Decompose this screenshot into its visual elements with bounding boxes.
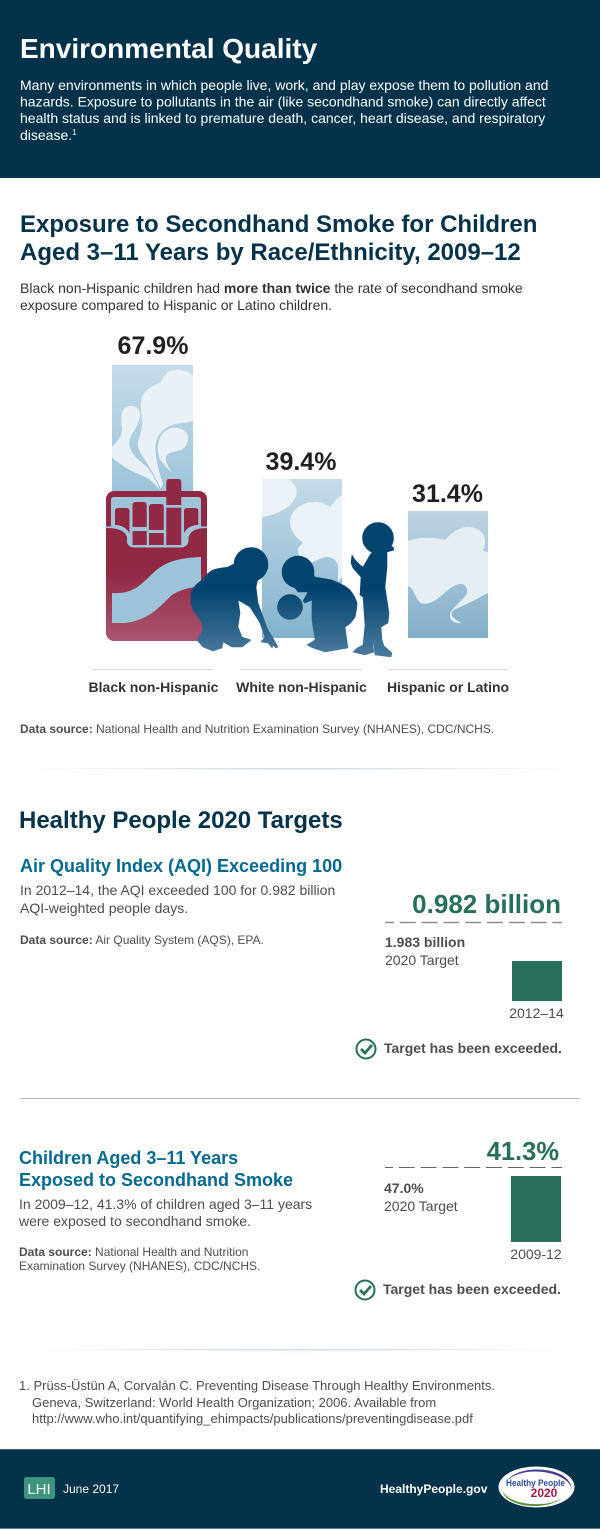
icon: standing child <box>351 522 394 657</box>
target label: 47.0% <box>384 1180 424 1196</box>
icon: check <box>356 1040 376 1058</box>
intro text: Many environments in which people live, work, and play expose them to pollution and <box>20 77 548 93</box>
bar: White non-Hispanic <box>262 479 342 638</box>
heading: secondhand smoke: Exposure to Secondhand Smoke for Children <box>20 211 537 238</box>
panel text: In 2012–14, the AQI exceeded 100 for 0.982 billion <box>20 882 335 898</box>
logo: Healthy People 2020: 2020 <box>531 1486 558 1500</box>
value labels: 67.9% <box>118 332 188 360</box>
status: Target has been exceeded. <box>384 1040 562 1056</box>
value: 0.982 billion <box>412 889 561 919</box>
panel heading: Children Aged 3–11 Years <box>19 1148 238 1168</box>
panel: Children exposed <box>18 1138 562 1300</box>
LHI badge <box>24 1477 55 1499</box>
value labels: 31.4% <box>412 480 483 508</box>
panel: Air Quality Index <box>20 856 564 1058</box>
reference note: Geneva, Switzerland: World Health Organization; 2006. Available from <box>32 1395 436 1410</box>
intro text: disease. <box>20 127 72 143</box>
reference note: http://www.who.int/quantifying_ehimpacts/publications/preventingdisease.pdf <box>32 1411 473 1426</box>
panel heading: Exposed to Secondhand Smoke <box>19 1170 293 1190</box>
data source: Examination Survey (NHANES), CDC/NCHS. <box>19 1259 260 1273</box>
bar: Hispanic or Latino <box>408 511 488 638</box>
target label: 2020 Target <box>384 1198 458 1214</box>
title: Environmental Quality <box>20 33 318 64</box>
heading: secondhand smoke: Aged 3–11 Years by Race/Ethnicity, 2009–12 <box>20 239 521 266</box>
bar <box>511 1176 561 1242</box>
intro text: health status and is linked to premature death, cancer, heart disease, and respiratory <box>20 110 545 126</box>
panel text: were exposed to secondhand smoke. <box>18 1213 251 1229</box>
chart: secondhand smoke exposure <box>89 332 509 695</box>
panel text: In 2009–12, 41.3% of children aged 3–11 years <box>19 1196 312 1212</box>
intro text: 1 <box>72 128 77 137</box>
icon: cigarette pack <box>106 479 207 641</box>
icon: check <box>356 1280 374 1300</box>
category labels <box>89 679 509 695</box>
footer band <box>0 1449 600 1529</box>
value: 41.3% <box>487 1138 559 1166</box>
category labels: Black non-Hispanic <box>89 679 219 695</box>
header band <box>0 0 600 178</box>
target label: 2020 Target <box>385 952 459 968</box>
year label: 2012–14 <box>509 1005 564 1021</box>
target line <box>385 922 562 924</box>
reference note: 1. Prüss-Üstün A, Corvalán C. Preventing Disease Through Healthy Environments. <box>19 1378 495 1393</box>
category labels: Hispanic or Latino <box>387 679 509 695</box>
data source: Data source: Air Quality System (AQS), EPA. <box>20 933 264 947</box>
intro text: hazards. Exposure to pollutants in the air (like secondhand smoke) can directly affect <box>20 94 546 110</box>
panel heading: Air Quality Index (AQI) Exceeding 100 <box>20 856 342 876</box>
value labels: 39.4% <box>266 448 336 476</box>
bar: Black non-Hispanic <box>112 365 193 495</box>
logo: Healthy People 2020 <box>498 1466 574 1508</box>
target label: 1.983 billion <box>385 934 465 950</box>
data source: NHANES: Data source: National Health and Nutrition Examination Survey (NHANES), CDC/NCHS. <box>20 722 494 736</box>
axis rules <box>92 669 508 670</box>
date: June 2017 <box>63 1482 119 1496</box>
LHI badge: LHI <box>27 1481 51 1498</box>
value labels <box>118 332 483 508</box>
category labels: White non-Hispanic <box>236 679 367 695</box>
logo: Healthy People 2020: Healthy People <box>506 1478 565 1489</box>
target line <box>385 1166 562 1168</box>
chart description: Black non-Hispanic children had <box>20 280 224 296</box>
panel text: AQI-weighted people days. <box>20 900 188 916</box>
chart description: exposure compared to Hispanic or Latino children. <box>20 297 332 313</box>
icon: crouching child <box>191 548 278 651</box>
icon: child with ball <box>278 556 357 652</box>
data source: Data source: <box>19 1245 92 1259</box>
heading: targets: Healthy People 2020 Targets <box>19 807 343 834</box>
data source: National Health and Nutrition <box>92 1245 248 1259</box>
bar <box>512 961 562 1001</box>
year label: 2009-12 <box>510 1246 562 1262</box>
chart description: more than twice the rate of secondhand smoke <box>224 280 523 296</box>
status: Target has been exceeded. <box>383 1281 561 1297</box>
site link: HealthyPeople.gov <box>380 1482 488 1496</box>
